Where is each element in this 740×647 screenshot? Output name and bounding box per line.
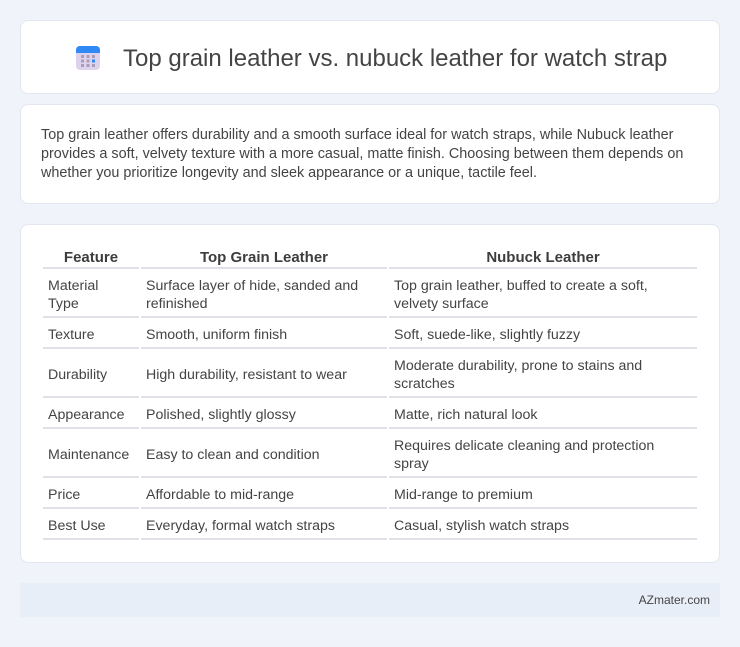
- comparison table: Moderate durability, prone to stains and: [394, 358, 642, 374]
- comparison table: scratches: [394, 376, 455, 392]
- comparison table: velvety surface: [394, 296, 489, 312]
- footer bar: [20, 583, 720, 617]
- intro text: Top grain leather offers durability and a smooth surface ideal for watch straps, while Nubuck leather: [41, 127, 673, 143]
- comparison table: Top grain leather, buffed to create a soft,: [394, 278, 648, 294]
- comparison table: Maintenance: [48, 446, 129, 462]
- comparison table: Top Grain Leather: [200, 249, 328, 266]
- comparison table: Price: [48, 486, 80, 502]
- comparison table: Material: [48, 278, 98, 294]
- comparison table: Feature: [64, 249, 118, 266]
- comparison table: Easy to clean and condition: [146, 446, 320, 462]
- comparison table: Casual, stylish watch straps: [394, 518, 569, 534]
- comparison table: Smooth, uniform finish: [146, 326, 287, 342]
- comparison table panel: [20, 224, 720, 563]
- intro text: [41, 127, 683, 181]
- comparison table: [43, 249, 697, 540]
- title: Top grain leather vs. nubuck leather for watch strap: [123, 45, 667, 72]
- comparison table: Soft, suede-like, slightly fuzzy: [394, 326, 580, 342]
- header panel: [20, 20, 720, 94]
- comparison table: Requires delicate cleaning and protection: [394, 438, 654, 454]
- comparison table: Affordable to mid-range: [146, 486, 294, 502]
- comparison table: Polished, slightly glossy: [146, 406, 296, 422]
- comparison table: High durability, resistant to wear: [146, 366, 347, 382]
- icon: calendar: [76, 46, 100, 70]
- comparison table: Type: [48, 296, 79, 312]
- intro panel: [20, 104, 720, 204]
- comparison table: Durability: [48, 366, 107, 382]
- comparison table: Surface layer of hide, sanded and: [146, 278, 358, 294]
- comparison table: refinished: [146, 296, 208, 312]
- comparison table: Texture: [48, 326, 95, 342]
- comparison table: Everyday, formal watch straps: [146, 518, 335, 534]
- footer brand text: AZmater.com: [639, 593, 710, 607]
- intro text: whether you prioritize longevity and sleek appearance or a unique, tactile feel.: [41, 165, 537, 181]
- intro text: provides a soft, velvety texture with a more casual, matte finish. Choosing between them depends on: [41, 146, 683, 162]
- comparison table: Matte, rich natural look: [394, 406, 538, 422]
- comparison table: spray: [394, 456, 429, 472]
- comparison table: Mid-range to premium: [394, 486, 533, 502]
- comparison table: Nubuck Leather: [486, 249, 600, 266]
- comparison table: Appearance: [48, 406, 125, 422]
- comparison table: Best Use: [48, 518, 106, 534]
